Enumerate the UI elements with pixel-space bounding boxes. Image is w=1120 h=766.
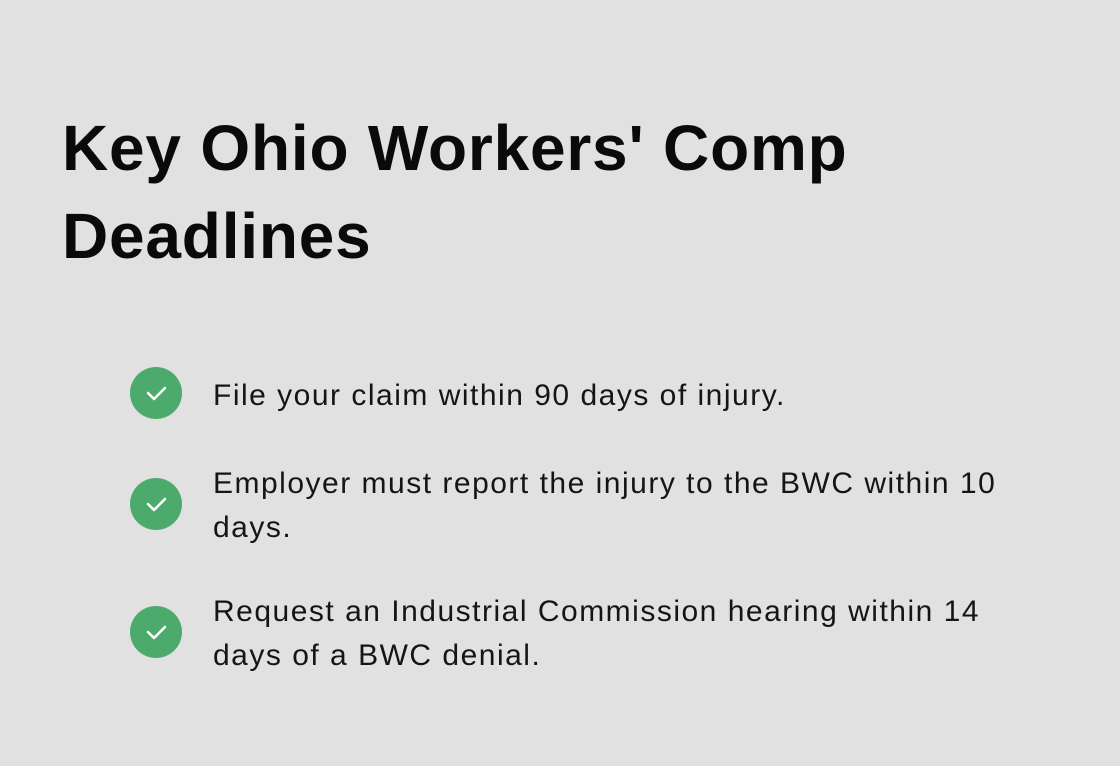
list item 1 — [130, 367, 786, 419]
text 2 — [213, 467, 996, 544]
text 3 — [213, 595, 980, 672]
icon: check 2 — [130, 478, 182, 530]
text 2: days. — [213, 511, 292, 544]
title: Deadlines — [62, 200, 372, 272]
text 1: File your claim within 90 days of injury. — [213, 379, 786, 412]
text 2: Employer must report the injury to the BWC within 10 — [213, 467, 996, 500]
list item 2 — [130, 467, 996, 544]
text 3: days of a BWC denial. — [213, 639, 541, 672]
icon: check 3 — [130, 606, 182, 658]
title — [62, 112, 848, 272]
title: Key Ohio Workers' Comp — [62, 112, 848, 184]
list item 3 — [130, 595, 980, 672]
text 3: Request an Industrial Commission hearing within 14 — [213, 595, 980, 628]
icon: check 1 — [130, 367, 182, 419]
